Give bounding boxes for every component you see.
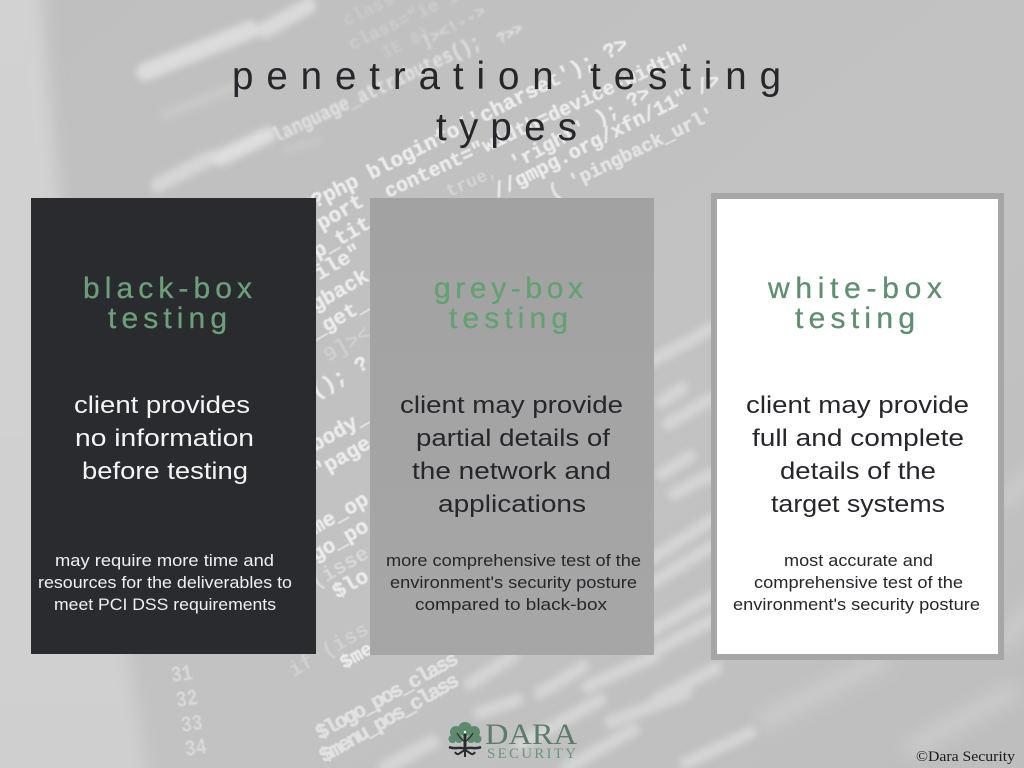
logo: Dara Security bbox=[448, 718, 577, 762]
code lines, in focus: 9]>< bbox=[320, 323, 376, 368]
code lines, in focus: $lo bbox=[329, 566, 374, 605]
blurred code: right and bottom bbox=[385, 328, 750, 768]
code lines, in focus: l_get_ bbox=[297, 293, 374, 351]
code lines, soft: IE 8) bbox=[380, 25, 434, 63]
wordmark: SECURITY bbox=[487, 746, 576, 762]
panel: grey-box testing bbox=[370, 198, 654, 655]
icon: tree bbox=[448, 722, 482, 757]
blurred code: upper left bbox=[145, 6, 319, 185]
code lines, in focus: p_tit bbox=[309, 213, 376, 265]
code lines, in focus: if (iss bbox=[286, 619, 374, 683]
code lines, soft: language_attributes(); bbox=[269, 32, 486, 149]
code lines, in focus: 32 bbox=[175, 686, 199, 715]
description: white-box: client may provide bbox=[746, 392, 969, 419]
code lines, in focus: 'right' ); ?> bbox=[506, 83, 655, 176]
code lines, in focus: (isse bbox=[307, 543, 374, 595]
note: black-box bbox=[38, 552, 292, 614]
note: black-box: may require more time and bbox=[55, 552, 274, 570]
description: grey-box bbox=[400, 392, 623, 518]
code lines, in focus: ="page bbox=[299, 433, 376, 491]
note: black-box: meet PCI DSS requirements bbox=[54, 596, 276, 614]
title: penetration testing bbox=[232, 55, 781, 98]
description: grey-box: client may provide bbox=[400, 392, 623, 419]
note: grey-box: compared to black-box bbox=[415, 596, 608, 614]
note: white-box: environment's security posture bbox=[733, 596, 980, 614]
code lines, in focus: eme_op bbox=[297, 489, 374, 547]
heading: grey-box testing: grey-box bbox=[434, 272, 583, 305]
note: white-box: comprehensive test of the bbox=[754, 574, 963, 592]
heading: white-box testing bbox=[767, 272, 942, 335]
note: white-box bbox=[733, 552, 980, 614]
code lines, in focus: body_ bbox=[307, 406, 374, 458]
heading: black-box testing bbox=[83, 272, 252, 335]
heading: white-box testing: white-box bbox=[767, 272, 942, 305]
description: black-box: before testing bbox=[82, 458, 248, 485]
code lines, in focus: 34 bbox=[184, 735, 208, 764]
description: grey-box: applications bbox=[438, 491, 586, 518]
wordmark bbox=[485, 718, 577, 762]
code lines, in focus: content="width=device-width" bbox=[381, 41, 696, 204]
code lines, in focus: (); ? bbox=[307, 353, 374, 405]
description: white-box: details of the bbox=[780, 458, 936, 485]
description: grey-box: the network and bbox=[412, 458, 611, 485]
note: black-box: resources for the deliverables to bbox=[38, 574, 292, 592]
code lines, in focus: 31 bbox=[170, 661, 194, 690]
note: white-box: most accurate and bbox=[784, 552, 933, 570]
heading: grey-box testing bbox=[434, 272, 583, 335]
code lines, soft: ]><!--> bbox=[418, 3, 490, 53]
code lines, in focus: 33 bbox=[180, 711, 204, 740]
description: white-box bbox=[746, 392, 969, 518]
code lines, in focus: $logo_pos_class bbox=[312, 648, 463, 746]
code lines, in focus: <?php bloginfo('charset'); ?> bbox=[297, 34, 633, 220]
heading: grey-box testing: testing bbox=[449, 302, 568, 335]
description: white-box: full and complete bbox=[752, 425, 964, 452]
code lines, in focus: file" bbox=[300, 241, 366, 293]
description: black-box: client provides bbox=[74, 392, 250, 419]
description: black-box: no information bbox=[75, 425, 254, 452]
panel: white-box testing bbox=[711, 193, 1004, 660]
code lines, in focus: ogo_po bbox=[297, 516, 374, 574]
faint wide streaks bbox=[766, 470, 1024, 747]
note: grey-box bbox=[386, 552, 641, 614]
code lines, in focus: $menu_pos_class bbox=[316, 670, 464, 768]
code lines, in focus: gback bbox=[307, 266, 374, 318]
code lines, in focus: ( 'pingback_url' bbox=[545, 104, 719, 203]
heading: black-box testing: black-box bbox=[83, 272, 252, 305]
title: types bbox=[436, 106, 577, 149]
title bbox=[232, 55, 781, 149]
heading: white-box testing: testing bbox=[795, 302, 915, 335]
note: grey-box: environment's security posture bbox=[390, 574, 637, 592]
note: grey-box: more comprehensive test of the bbox=[386, 552, 641, 570]
panel: black-box testing bbox=[31, 198, 316, 654]
code lines, in focus bbox=[170, 34, 725, 768]
description: black-box bbox=[74, 392, 254, 485]
code lines, in focus: //gmpg.org/xfn/11" /> bbox=[490, 69, 725, 204]
code lines, in focus: port bbox=[313, 191, 368, 236]
description: grey-box: partial details of bbox=[416, 425, 610, 452]
description: white-box: target systems bbox=[771, 491, 945, 518]
code lines, in focus: $me bbox=[336, 638, 377, 674]
copyright: ©Dara Security bbox=[916, 749, 1016, 765]
heading: black-box testing: testing bbox=[108, 302, 227, 335]
code lines, soft: ?>> bbox=[494, 21, 526, 48]
wordmark: DARA bbox=[485, 718, 577, 751]
code lines, in focus: true, bbox=[443, 162, 501, 202]
